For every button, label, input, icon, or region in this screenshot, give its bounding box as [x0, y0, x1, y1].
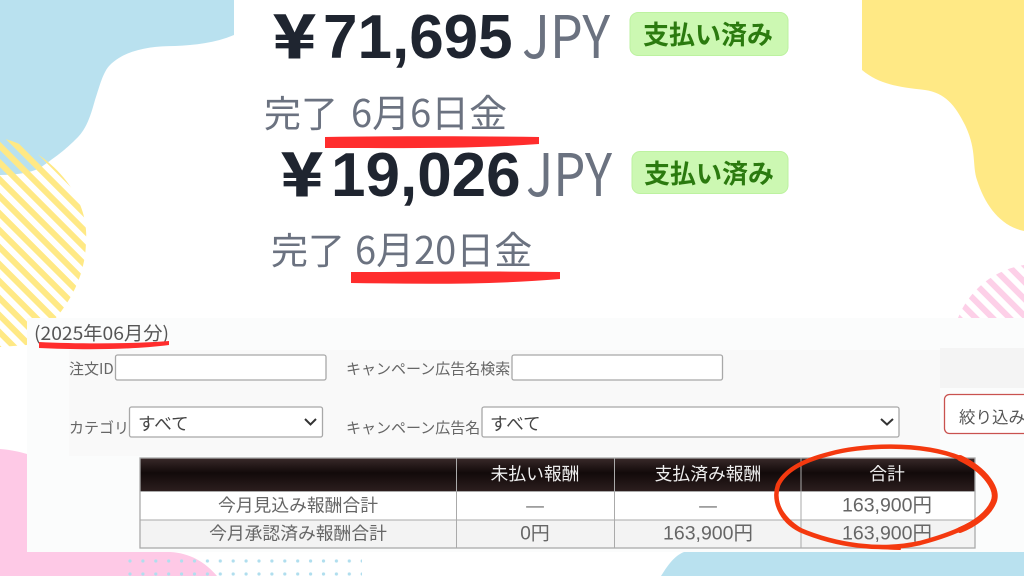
background blob: pink bottom left	[0, 449, 217, 576]
period heading: (2025年06月分)	[34, 320, 169, 346]
select: category: すべて	[138, 411, 189, 436]
amount 2: 19,026	[331, 141, 521, 210]
table header	[491, 464, 905, 484]
label: campaign search: キャンペーン広告名検索	[346, 358, 510, 379]
status 2: 完了	[271, 221, 345, 275]
payment row 1	[264, 0, 788, 148]
table header: 合計	[869, 464, 905, 484]
table row 1: 163,900円	[842, 494, 932, 516]
amount 1: 71,695	[323, 3, 513, 72]
select: campaign name	[482, 407, 899, 437]
status 1: 完了	[264, 84, 338, 138]
filter form	[69, 350, 940, 456]
table row 1: ―	[526, 496, 544, 516]
table row 2: 163,900円	[663, 522, 753, 544]
callout: hand-drawn circle	[776, 446, 995, 549]
table row 1: 今月見込み報酬合計	[218, 496, 378, 516]
background blob: yellow top right	[862, 0, 1024, 231]
table row 2: 0円	[520, 524, 550, 544]
table row 1	[218, 494, 932, 516]
label: category: カテゴリ	[69, 417, 129, 438]
table row 2	[209, 522, 932, 544]
table header: 支払済み報酬	[655, 464, 761, 484]
date 2: 6月20日金	[355, 220, 532, 275]
badge 2: 支払い済み	[644, 154, 774, 191]
table row 2: 今月承認済み報酬合計	[209, 524, 387, 544]
background circle: pink stripes	[958, 265, 1024, 318]
input: order id	[116, 355, 326, 380]
button: filter: 絞り込み	[959, 404, 1024, 428]
button: filter	[944, 394, 1024, 434]
select: campaign name: すべて	[490, 411, 541, 436]
background dots	[124, 555, 362, 576]
label: campaign name: キャンペーン広告名	[346, 417, 480, 438]
table row 1: ―	[699, 496, 717, 516]
gray box	[940, 348, 1024, 388]
label: order id: 注文ID	[69, 358, 114, 379]
select: category	[130, 407, 322, 437]
input: campaign search	[512, 355, 722, 380]
background blob: blue bottom right	[661, 552, 1024, 576]
table row 2: 163,900円	[842, 522, 932, 544]
underline 2	[351, 272, 560, 284]
table header: 未払い報酬	[491, 464, 579, 484]
background circle: yellow stripes	[0, 138, 86, 347]
payment row 2	[271, 127, 788, 284]
yen sign 2: ¥	[281, 127, 323, 214]
underline 1	[325, 136, 539, 148]
currency 2: JPY	[526, 128, 613, 213]
summary table	[140, 458, 975, 548]
date 1: 6月6日金	[351, 83, 507, 138]
background blob: blue top left	[0, 0, 234, 175]
period underline	[39, 341, 169, 349]
badge 1: 支払い済み	[643, 15, 773, 52]
panel: report screenshot	[27, 318, 1024, 552]
